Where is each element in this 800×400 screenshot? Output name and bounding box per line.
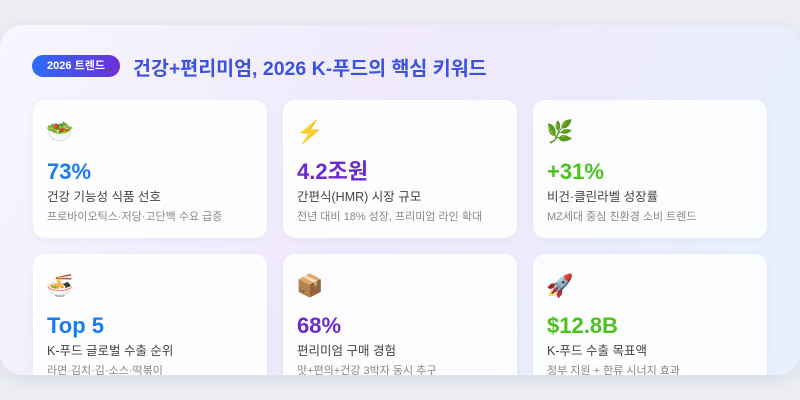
card: HMR — [283, 100, 517, 238]
card: export rank — [33, 254, 267, 392]
card: vegan: 🌿 — [546, 119, 573, 144]
card: export target: K-푸드 수출 목표액 — [547, 344, 647, 358]
card: health: 73% — [47, 159, 91, 184]
card: export rank: 🍜 — [46, 273, 73, 298]
card: vegan: MZ세대 중심 친환경 소비 트렌드 — [547, 211, 697, 223]
card: HMR: 4.2조원 — [297, 159, 368, 184]
card: vegan: +31% — [547, 159, 604, 184]
card: HMR: 간편식(HMR) 시장 규모 — [297, 190, 421, 204]
card: health: 건강 기능성 식품 선호 — [47, 190, 161, 204]
card: export target: $12.8B — [547, 313, 618, 338]
card: premium: 📦 — [296, 273, 323, 298]
badge — [32, 55, 120, 77]
card: export target — [533, 254, 767, 392]
card: premium — [283, 254, 517, 392]
card: premium: 편리미엄 구매 경험 — [297, 344, 396, 358]
card: health: 프로바이오틱스·저당·고단백 수요 급증 — [47, 211, 222, 223]
card: health — [33, 100, 267, 238]
card: export rank: Top 5 — [47, 313, 104, 338]
card: premium: 68% — [297, 313, 341, 338]
card: vegan: 비건·클린라벨 성장률 — [547, 190, 658, 204]
card: HMR: ⚡ — [296, 119, 323, 144]
card: vegan — [533, 100, 767, 238]
title: 건강+편리미엄, 2026 K-푸드의 핵심 키워드 — [133, 58, 487, 80]
card: export rank: K-푸드 글로벌 수출 순위 — [47, 344, 173, 358]
card: HMR: 전년 대비 18% 성장, 프리미엄 라인 확대 — [297, 211, 482, 223]
badge: 2026 트렌드 — [47, 60, 105, 72]
card: health: 🥗 — [46, 119, 73, 144]
card: export target: 🚀 — [546, 273, 573, 298]
